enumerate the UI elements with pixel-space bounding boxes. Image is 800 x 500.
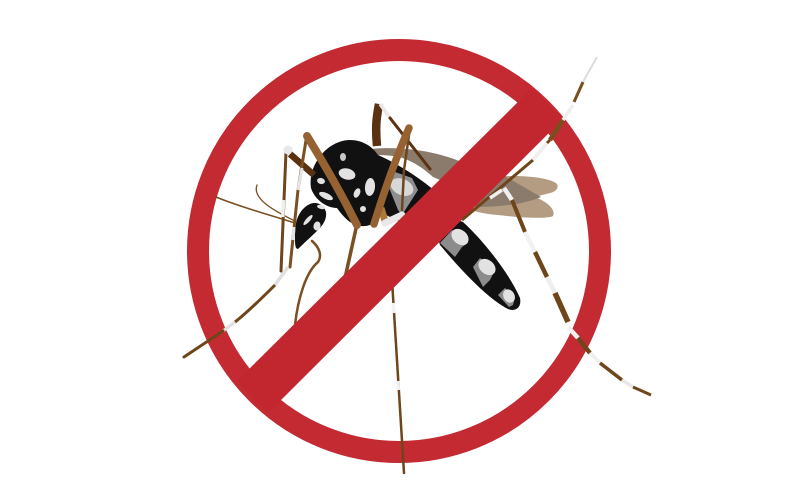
abdomen spots: [448, 226, 472, 248]
middle leg: [374, 104, 430, 224]
mosquito head: [295, 203, 326, 249]
right upper leg: [462, 57, 597, 220]
thorax spots: [388, 172, 418, 215]
mosquito thorax: [311, 140, 445, 226]
left front leg: [281, 146, 314, 271]
prohibition bar: [237, 88, 563, 413]
mosquito wings: [370, 148, 558, 218]
prohibition ring: [198, 50, 600, 452]
front leg with long tarsus: [184, 134, 357, 357]
abdomen bands: [440, 230, 515, 307]
bottom hind leg: [392, 280, 404, 473]
near-thorax leg stubs: [345, 208, 386, 278]
mosquito abdomen: [430, 210, 520, 310]
antennae and proboscis: [216, 185, 320, 325]
right hind leg: [490, 188, 651, 395]
